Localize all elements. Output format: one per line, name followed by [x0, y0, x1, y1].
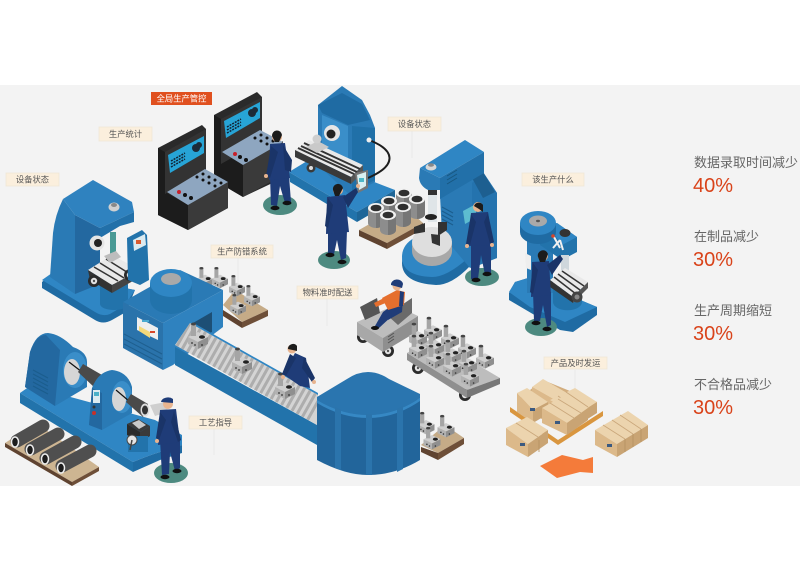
label: process guidance — [189, 416, 242, 429]
stat: work in process reduced: 在制品减少 — [694, 229, 759, 244]
label: error proofing system: 生产防错系统 — [217, 246, 267, 256]
stat: defects reduced — [693, 377, 772, 419]
stat: data entry time reduced: 40% — [693, 175, 733, 197]
label: global production control — [151, 92, 212, 105]
label connector lines — [214, 131, 575, 455]
tugger vehicle and driver — [357, 279, 418, 357]
worker at touch screen — [318, 184, 360, 269]
worker at drill press — [465, 202, 499, 286]
label: equipment status right: 设备状态 — [398, 119, 431, 129]
carton group middle back — [550, 388, 597, 427]
milling table — [295, 134, 363, 184]
stacked cartons on pallets — [506, 379, 648, 457]
control console rear — [214, 92, 283, 197]
mill table — [88, 251, 140, 293]
milling machine top centre — [289, 86, 395, 222]
label: equipment status left: 设备状态 — [16, 174, 49, 184]
arrow — [540, 455, 593, 478]
label: on-time shipping: 产品及时发运 — [551, 358, 601, 368]
carton group front left — [506, 417, 548, 457]
stat: data entry time reduced — [693, 155, 798, 197]
press box with tunnel — [123, 269, 223, 370]
label: equipment status left — [6, 173, 59, 186]
carton group back — [532, 379, 567, 412]
lathe panel — [92, 390, 100, 415]
chuck — [412, 214, 452, 266]
carton group front right — [595, 411, 648, 457]
label: production statistics: 生产统计 — [109, 129, 142, 139]
label: on-time material delivery — [297, 286, 358, 299]
stat: production cycle shortened: 30% — [693, 323, 733, 345]
stat: defects reduced: 不合格品减少 — [694, 377, 772, 392]
cable — [368, 140, 390, 178]
lathe gauge block — [127, 419, 150, 452]
worker at small drill — [525, 250, 563, 336]
label: what to produce — [522, 173, 584, 186]
tunnel panel — [137, 317, 158, 340]
worker at console — [263, 130, 297, 215]
stat: data entry time reduced: 数据录取时间减少 — [694, 155, 798, 170]
pallet of parts right of hopper — [418, 412, 464, 460]
drill press machine — [402, 140, 497, 285]
stat: work in process reduced: 30% — [693, 249, 733, 271]
label: what to produce: 该生产什么 — [532, 174, 574, 184]
stat: production cycle shortened: 生产周期缩短 — [694, 303, 772, 318]
curved hopper at conveyor end — [317, 372, 420, 475]
label: on-time shipping — [544, 357, 607, 369]
background panel — [0, 85, 800, 486]
drill table — [550, 268, 588, 303]
label: production statistics — [99, 127, 152, 141]
milling machine left — [42, 180, 149, 322]
touch screen — [355, 170, 368, 193]
control console front — [158, 125, 228, 230]
label: error proofing system — [211, 245, 273, 258]
pallet of pipes — [5, 423, 99, 486]
pallet of parts near tunnel — [197, 267, 268, 328]
label: on-time material delivery: 物料准时配送 — [303, 288, 353, 298]
pallet of cylinders — [359, 188, 425, 249]
stat: production cycle shortened — [693, 303, 772, 345]
carton group left — [517, 388, 548, 423]
mill panel — [127, 230, 149, 285]
label: equipment status right — [388, 117, 441, 131]
carton group centre — [542, 395, 588, 435]
stat: work in process reduced — [693, 229, 759, 271]
label: global production control: 全局生产管控 — [157, 94, 206, 104]
small drill machine — [509, 211, 597, 332]
conveyor belt — [175, 321, 318, 445]
worker at conveyor — [281, 344, 316, 388]
trailer loaded with parts — [407, 317, 500, 401]
worker at lathe — [154, 397, 188, 483]
stat: defects reduced: 30% — [693, 397, 733, 419]
label: process guidance: 工艺指导 — [199, 418, 232, 428]
lathe machine — [20, 333, 182, 472]
